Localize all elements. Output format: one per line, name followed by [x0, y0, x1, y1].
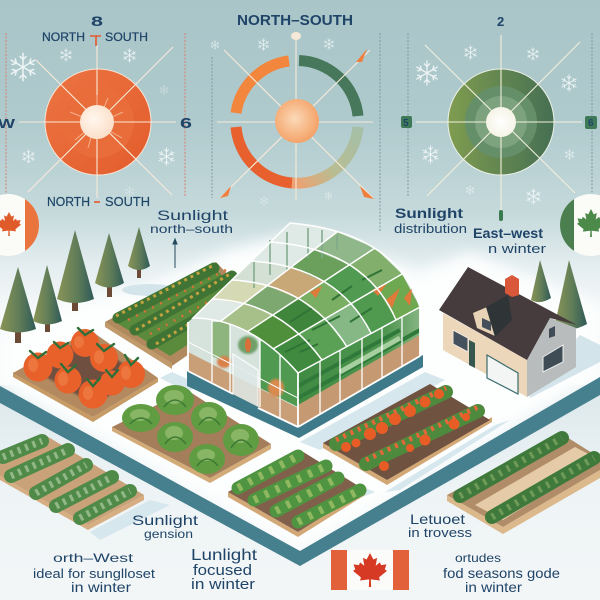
- bed: lettuce rows center: [228, 450, 365, 537]
- panel: green sun diagram: [401, 14, 597, 221]
- text: north-west ideal: orth–West: [53, 551, 134, 565]
- small core rays: [70, 95, 123, 148]
- road band: [0, 377, 600, 566]
- greenhouse edge posts: [188, 307, 420, 427]
- text: sunlight gension: gension: [144, 527, 193, 541]
- trees: right group: [531, 260, 587, 329]
- title: north-south: NORTH–SOUTH: [237, 13, 353, 29]
- text: sunlight north-south: north–south: [150, 222, 233, 236]
- text: sunlight gension: Sunlight: [132, 512, 198, 528]
- roof orange crops: [310, 282, 412, 308]
- tomato plants: [24, 329, 145, 408]
- text: sunlight north-south: Sunlight: [157, 207, 228, 223]
- compass label: south top: SOUTH: [105, 30, 148, 44]
- faded arc: [292, 127, 358, 183]
- side window lower: [543, 345, 563, 372]
- text: north-west ideal: in winter: [71, 579, 131, 595]
- cabbage veins: [130, 400, 252, 466]
- dormer roof: [486, 295, 512, 337]
- text: sunlight distribution: Sunlight: [395, 205, 463, 221]
- house roof: [439, 267, 577, 360]
- green arc: [299, 60, 358, 116]
- text: lettuce in trovess: [408, 511, 473, 540]
- house front wall: [443, 313, 527, 397]
- badge: east: [585, 116, 597, 129]
- arrow: sunlight pointer: [173, 239, 177, 268]
- text: for seasons guide: fod seasons gode: [443, 565, 560, 581]
- badge: west: [401, 116, 412, 129]
- red arc: [236, 127, 292, 183]
- text: sunlight distribution: [394, 205, 467, 236]
- house shadow: [528, 335, 600, 398]
- south tick: [94, 201, 100, 203]
- north tick: [90, 36, 101, 46]
- cabbage heads: [122, 385, 259, 474]
- dashed guide lines: [6, 33, 185, 197]
- bed: cabbages: [112, 385, 271, 483]
- ripe fruits: [341, 389, 470, 471]
- compass label: east: 6: [180, 115, 192, 132]
- text: sunlight focused: [191, 547, 258, 593]
- compass label: top: 2: [497, 14, 504, 29]
- snowflakes: [417, 46, 576, 204]
- top marker: [291, 32, 301, 40]
- text: north-west ideal: ideal for sunglloset: [33, 566, 155, 581]
- chimney: [505, 275, 519, 297]
- greenhouse end wall: [188, 318, 298, 426]
- greenhouse base: [187, 355, 423, 438]
- flag: left round canada: [0, 194, 40, 256]
- sun core: [486, 107, 516, 137]
- text: north-west ideal: [33, 551, 155, 595]
- door: [469, 340, 475, 368]
- trees: left group: [0, 227, 178, 343]
- flag: right round canada: [560, 194, 600, 256]
- text: sunlight north-south: [150, 207, 233, 236]
- roof leaf texture: [285, 270, 382, 352]
- bed: tomato and flower rows: [323, 384, 492, 485]
- text: sunlight focused: in winter: [191, 576, 255, 593]
- house side wall: [527, 318, 576, 397]
- text: lettuce in trovess: in trovess: [408, 525, 473, 540]
- greenhouse: [185, 215, 430, 438]
- orange sun disc: [45, 69, 151, 175]
- sunlight rays: [217, 36, 373, 200]
- text: east-west in winter: East–west: [473, 225, 543, 241]
- text: sunlight focused: Lunlight: [191, 547, 258, 564]
- cabbage highlights: [130, 390, 249, 461]
- tomato highlights: [28, 336, 131, 400]
- text: for seasons guide: ortudes: [455, 551, 501, 565]
- house: [439, 267, 600, 398]
- sun core: [80, 105, 114, 139]
- compass label: north bottom: NORTH: [47, 195, 90, 209]
- compass label: north mark: 8: [91, 13, 103, 29]
- dashed guide lines: [212, 33, 380, 232]
- seen-through back posts: [254, 228, 337, 288]
- text: east-west in winter: n winter: [488, 241, 547, 256]
- compass label: north top: NORTH: [42, 30, 85, 44]
- snow shadows: [90, 372, 510, 540]
- text: east-west in winter: [473, 225, 547, 256]
- snowflakes: [11, 49, 174, 197]
- sunlight rays: [416, 35, 582, 210]
- snowflakes: [211, 38, 334, 206]
- bed: tomatoes: [13, 328, 158, 422]
- lower snow field: [0, 385, 600, 600]
- greenhouse roof panels: [194, 224, 420, 372]
- flag: bottom canada: [331, 550, 409, 590]
- text: for seasons guide: [443, 551, 560, 595]
- garage door: [487, 355, 518, 394]
- bottom marker: [499, 210, 503, 221]
- sunlight rays: [19, 45, 176, 198]
- text: sunlight distribution: distribution: [394, 221, 467, 236]
- side window upper: [549, 326, 555, 338]
- orange arc: [236, 61, 289, 113]
- text: lettuce in trovess: Letuoet: [410, 511, 465, 527]
- text: sunlight focused: focused: [193, 562, 252, 579]
- bed: lower left leafy rows: [0, 435, 144, 530]
- badge: east: 6: [588, 118, 594, 129]
- green sun disc: [448, 69, 554, 175]
- tomato stems: [30, 328, 138, 386]
- panel: middle arc diagram: [211, 32, 380, 232]
- upper snow ground: [0, 232, 600, 552]
- dormer wall: [473, 307, 495, 336]
- front window: [453, 330, 468, 352]
- bed: back-left vegetable rows: [105, 262, 258, 369]
- greenhouse frame: [193, 223, 420, 373]
- text: sunlight gension: [132, 512, 198, 541]
- badge: west: 5: [403, 118, 409, 129]
- dormer window: [482, 318, 491, 331]
- greenhouse side wall: [298, 308, 420, 426]
- arrow tips: [220, 49, 374, 199]
- dashed guide lines: [408, 33, 592, 197]
- bed: right green rows: [447, 434, 600, 534]
- text: for seasons guide: in winter: [465, 579, 522, 595]
- sun ball: [275, 99, 319, 143]
- panel: orange sun diagram: [0, 13, 192, 209]
- compass label: south bottom: SOUTH: [105, 195, 150, 209]
